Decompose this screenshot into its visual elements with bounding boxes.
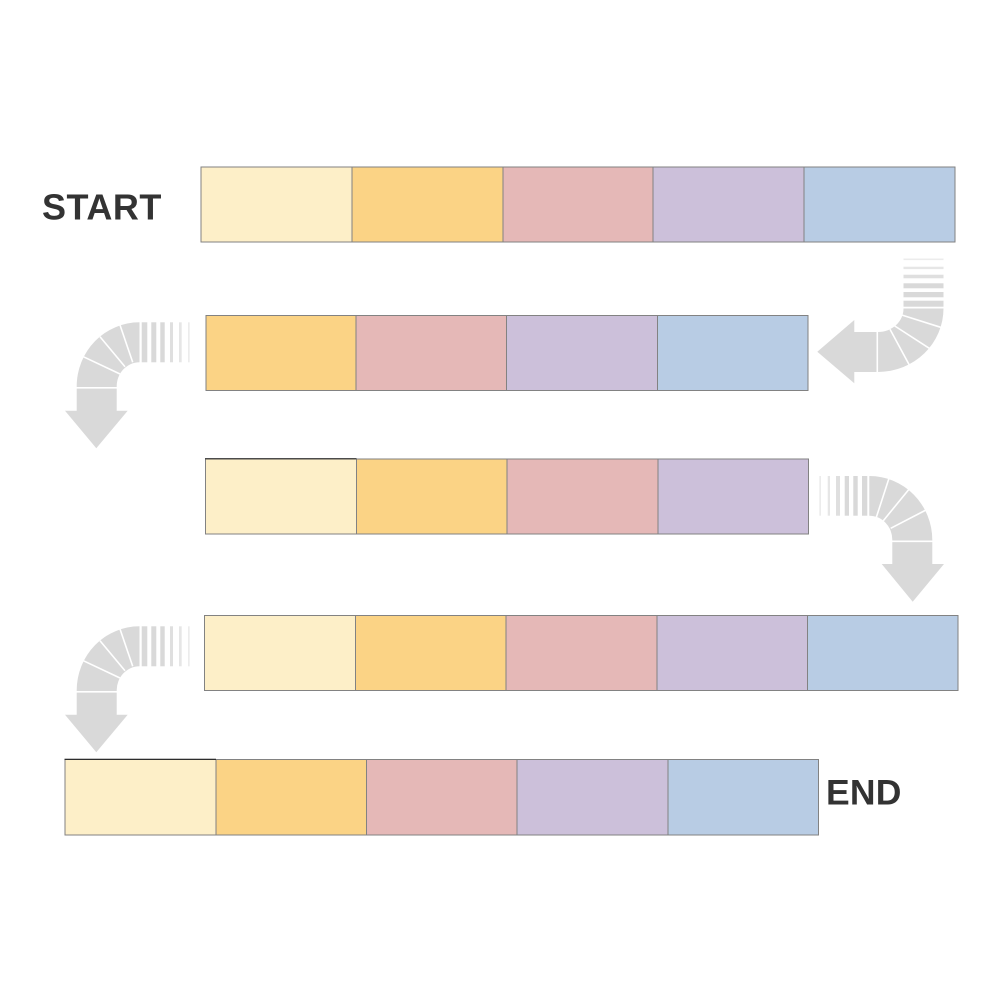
row 3 bar — [205, 459, 808, 534]
row 4 bar — [204, 616, 958, 690]
row 2 bar — [206, 316, 808, 390]
row 1 bar — [201, 167, 955, 242]
arrow: row 4 to row 5 — [65, 626, 190, 752]
arrow: row 1 to row 2 — [817, 258, 944, 383]
arrow: row 3 to row 4 — [819, 476, 944, 602]
end label: END — [826, 772, 902, 812]
arrow: row 2 to row 3 — [65, 322, 190, 448]
start label: START — [42, 186, 162, 228]
row 5 bar — [64, 759, 818, 835]
